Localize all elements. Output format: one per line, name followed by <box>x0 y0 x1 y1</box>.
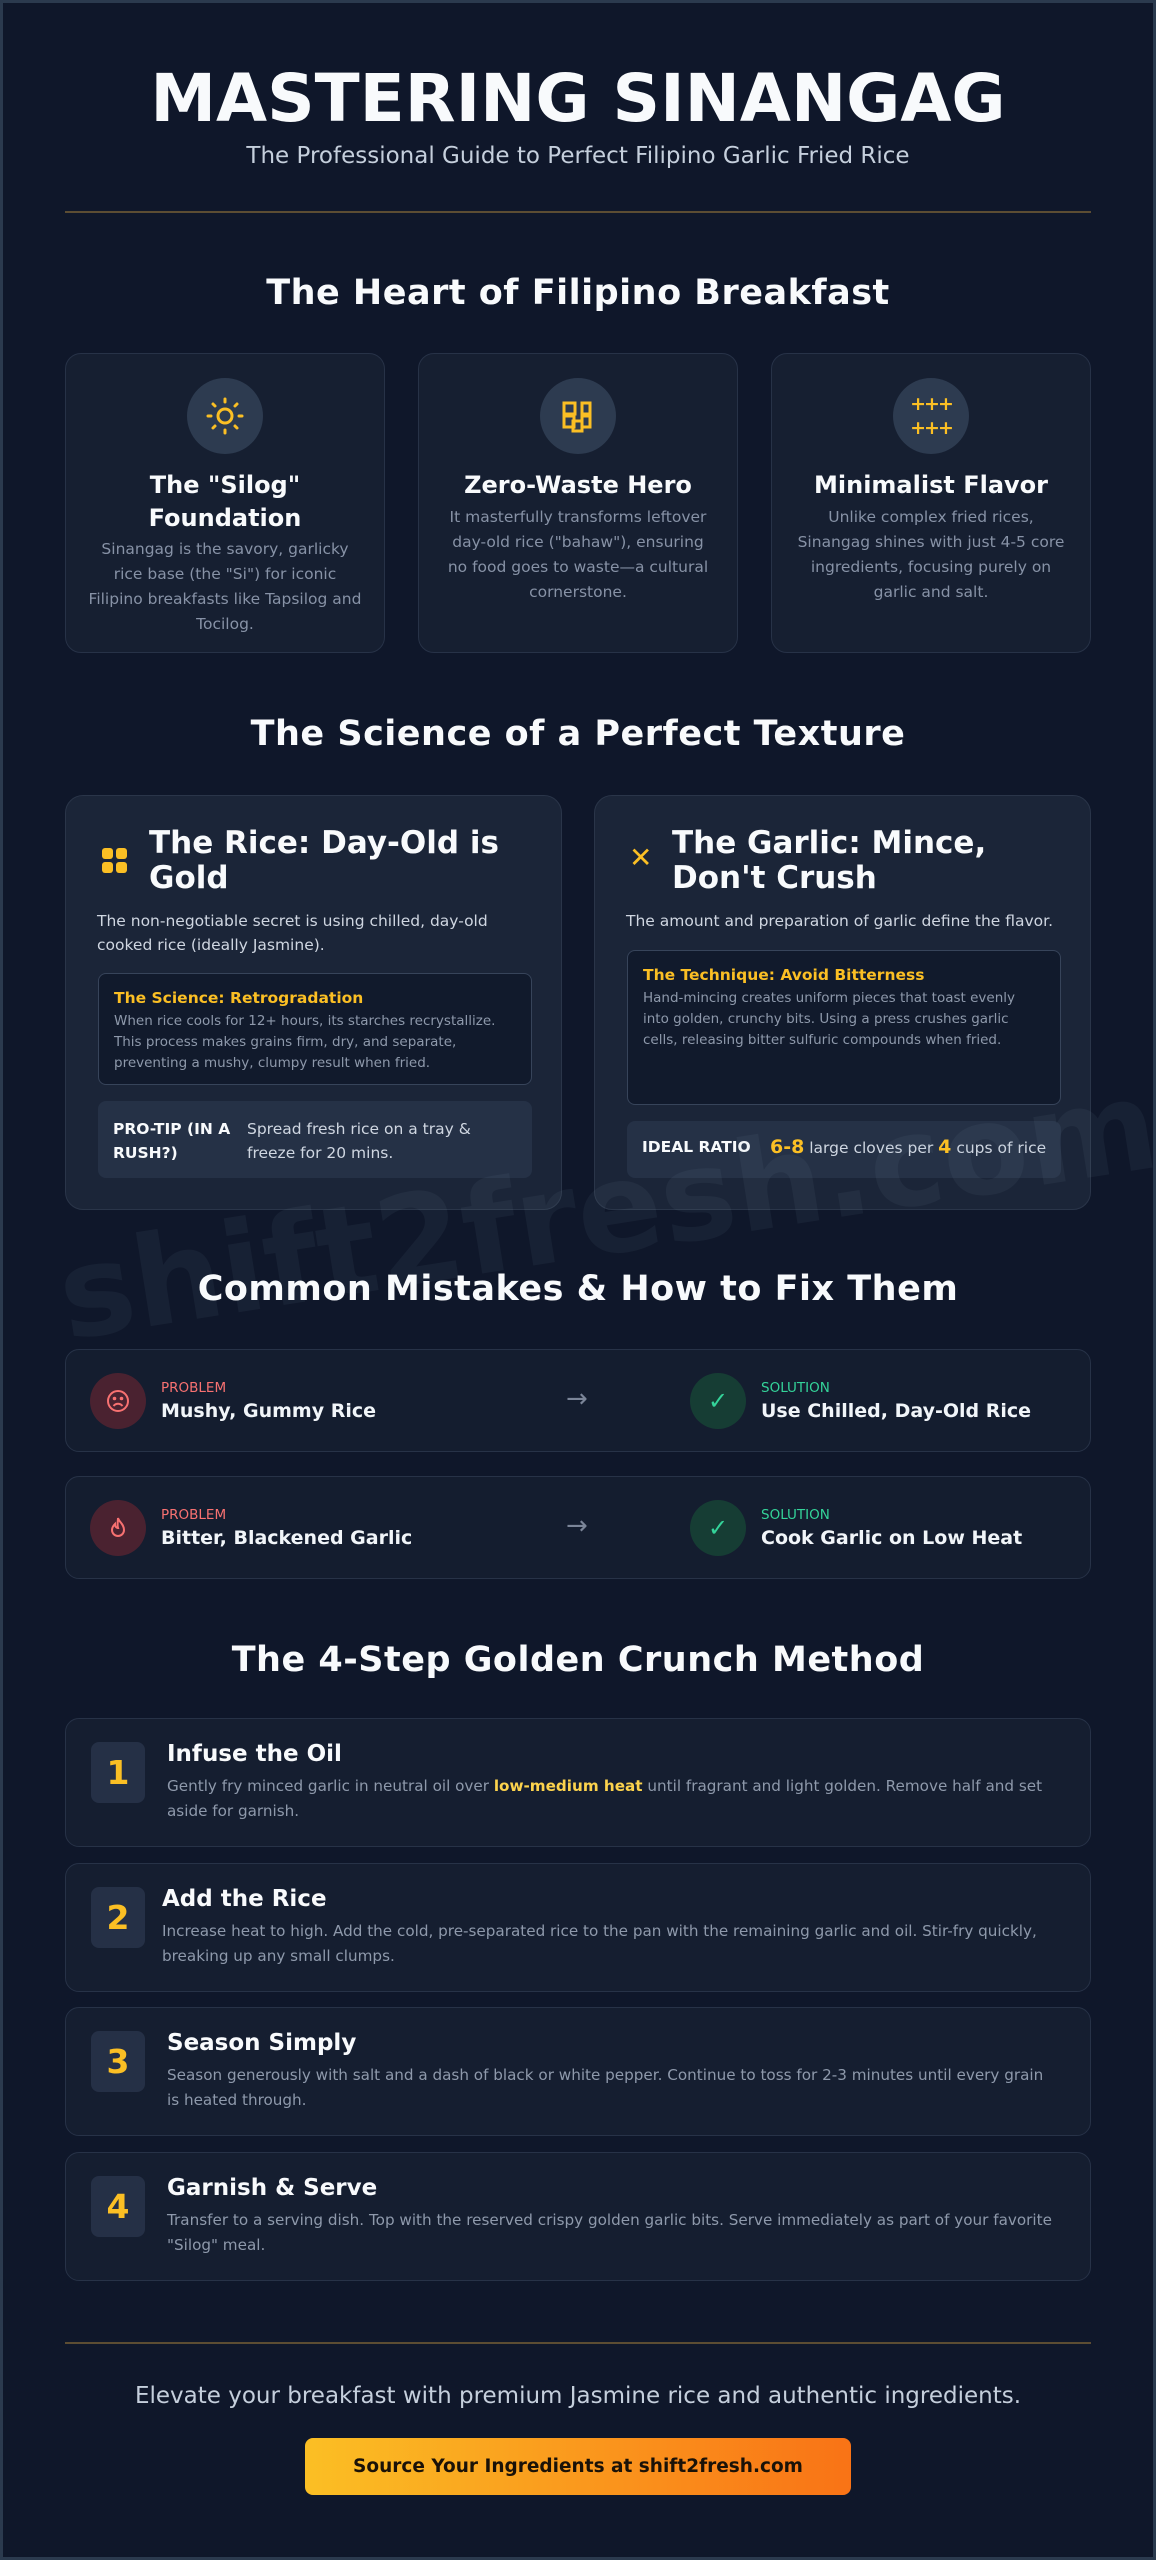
technique box: The Technique: Avoid Bitterness <box>643 966 924 984</box>
arrow: → <box>566 1511 588 1541</box>
panel: rice: Gold <box>149 860 229 896</box>
icon: grid <box>102 848 127 873</box>
card: zero waste <box>418 353 738 653</box>
heading: mistakes: Common Mistakes & How to Fix Them <box>198 1269 958 1309</box>
mistake row 1 <box>65 1349 1091 1452</box>
icon: check: ✓ <box>708 1514 728 1542</box>
icon: sun <box>187 378 263 454</box>
step 3 <box>65 2007 1091 2136</box>
mistake row 1: Mushy, Gummy Rice <box>161 1400 376 1422</box>
step 2 <box>65 1863 1091 1992</box>
arrow: → <box>566 1384 588 1414</box>
ratio: 6-8 large cloves per 4 cups of rice <box>770 1136 1046 1158</box>
step 4 <box>65 2152 1091 2281</box>
step 1 <box>65 1718 1091 1847</box>
step 2: Increase heat to high. Add the cold, pre-separated rice to the pan with the remaining garlic and oil. Stir-fry quickly, breaking up any small clumps. <box>162 1922 1037 1965</box>
card: zero waste: It masterfully transforms leftover day-old rice ("bahaw"), ensuring no food goes to waste—a cultural cornerstone. <box>448 508 708 601</box>
step 3: 3 <box>107 2042 129 2081</box>
step 3: Season generously with salt and a dash of black or white pepper. Continue to toss for 2-3 minutes until every grain is heated through. <box>167 2066 1043 2109</box>
icon: sparkles <box>893 378 969 454</box>
heading: steps: The 4-Step Golden Crunch Method <box>232 1640 924 1680</box>
icon: flame <box>90 1500 146 1556</box>
icon: check: ✓ <box>708 1387 728 1415</box>
card: minimalist: Unlike complex fried rices, Sinangag shines with just 4-5 core ingredients, focusing purely on garlic and salt. <box>798 508 1064 601</box>
step 4: 4 <box>107 2187 129 2226</box>
pro tip: PRO-TIP (IN A RUSH?) <box>113 1120 230 1162</box>
card: minimalist <box>771 353 1091 653</box>
button: Source Your Ingredients at shift2fresh.com <box>353 2456 803 2477</box>
step 2: 2 <box>107 1898 129 1937</box>
mistake row 1: PROBLEM <box>161 1380 226 1396</box>
icon: check <box>690 1373 746 1429</box>
heading: science: The Science of a Perfect Texture <box>251 714 905 754</box>
science box: When rice cools for 12+ hours, its starches recrystallize. This process makes grains firm, dry, and separate, preventing a mushy, clumpy result when fried. <box>114 1013 495 1071</box>
step 1: Infuse the Oil <box>167 1741 342 1767</box>
icon: sparkles: +++ <box>910 393 952 415</box>
watermark: shift2fresh.com <box>49 1052 1156 1369</box>
step 3: Season Simply <box>167 2030 356 2056</box>
card: minimalist: Minimalist Flavor <box>814 471 1048 499</box>
step 4: Transfer to a serving dish. Top with the reserved crispy golden garlic bits. Serve immediately as part of your favorite "Silog" meal. <box>167 2211 1052 2254</box>
icon: sad <box>90 1373 146 1429</box>
button <box>305 2438 851 2495</box>
pro tip <box>98 1101 532 1178</box>
step 1: Gently fry minced garlic in neutral oil over low-medium heat until fragrant and light golden. Remove half and set aside for garnish. <box>167 1777 1042 1820</box>
pro tip: Spread fresh rice on a tray & freeze for 20 mins. <box>247 1120 471 1162</box>
panel: rice: The non-negotiable secret is using chilled, day-old cooked rice (ideally Jasmine). <box>97 912 488 954</box>
panel: garlic: The Garlic: Mince, <box>672 825 986 861</box>
card: silog <box>65 353 385 653</box>
step 1: 1 <box>107 1753 129 1792</box>
technique box <box>627 950 1061 1105</box>
icon: cross: ✕ <box>629 841 652 874</box>
title: MASTERING SINANGAG <box>150 60 1006 137</box>
icon: check <box>690 1500 746 1556</box>
panel: garlic <box>594 795 1091 1210</box>
panel: rice <box>65 795 562 1210</box>
mistake row 1: SOLUTION <box>761 1380 830 1396</box>
ratio <box>627 1121 1061 1178</box>
mistake row 2: PROBLEM <box>161 1507 226 1523</box>
panel: garlic: Don't Crush <box>672 860 877 896</box>
science box: The Science: Retrogradation <box>114 989 363 1007</box>
mistake row 2: SOLUTION <box>761 1507 830 1523</box>
icon: boxes <box>540 378 616 454</box>
step 4: Garnish & Serve <box>167 2175 377 2201</box>
mistake row 2: Cook Garlic on Low Heat <box>761 1527 1022 1549</box>
icon: sparkles: +++ <box>910 417 952 439</box>
panel: garlic: The amount and preparation of garlic define the flavor. <box>626 912 1053 930</box>
card: silog: The "Silog" <box>150 471 300 499</box>
card: silog: Foundation <box>149 504 301 532</box>
subtitle: The Professional Guide to Perfect Filipino Garlic Fried Rice <box>246 143 910 169</box>
ratio: IDEAL RATIO <box>642 1138 751 1156</box>
footer text: Elevate your breakfast with premium Jasmine rice and authentic ingredients. <box>135 2383 1021 2409</box>
card: silog: Sinangag is the savory, garlicky rice base (the "Si") for iconic Filipino breakfasts like Tapsilog and Tocilog. <box>89 540 361 633</box>
card: zero waste: Zero-Waste Hero <box>464 471 692 499</box>
mistake row 2: Bitter, Blackened Garlic <box>161 1527 412 1549</box>
technique box: Hand-mincing creates uniform pieces that toast evenly into golden, crunchy bits. Using a press crushes garlic cells, releasing bitter sulfuric compounds when fried. <box>643 990 1015 1048</box>
panel: rice: The Rice: Day-Old is <box>149 825 499 861</box>
mistake row 1: Use Chilled, Day-Old Rice <box>761 1400 1031 1422</box>
heading: heart: The Heart of Filipino Breakfast <box>266 273 890 313</box>
science box <box>98 973 532 1085</box>
step 2: Add the Rice <box>162 1886 327 1912</box>
mistake row 2 <box>65 1476 1091 1579</box>
